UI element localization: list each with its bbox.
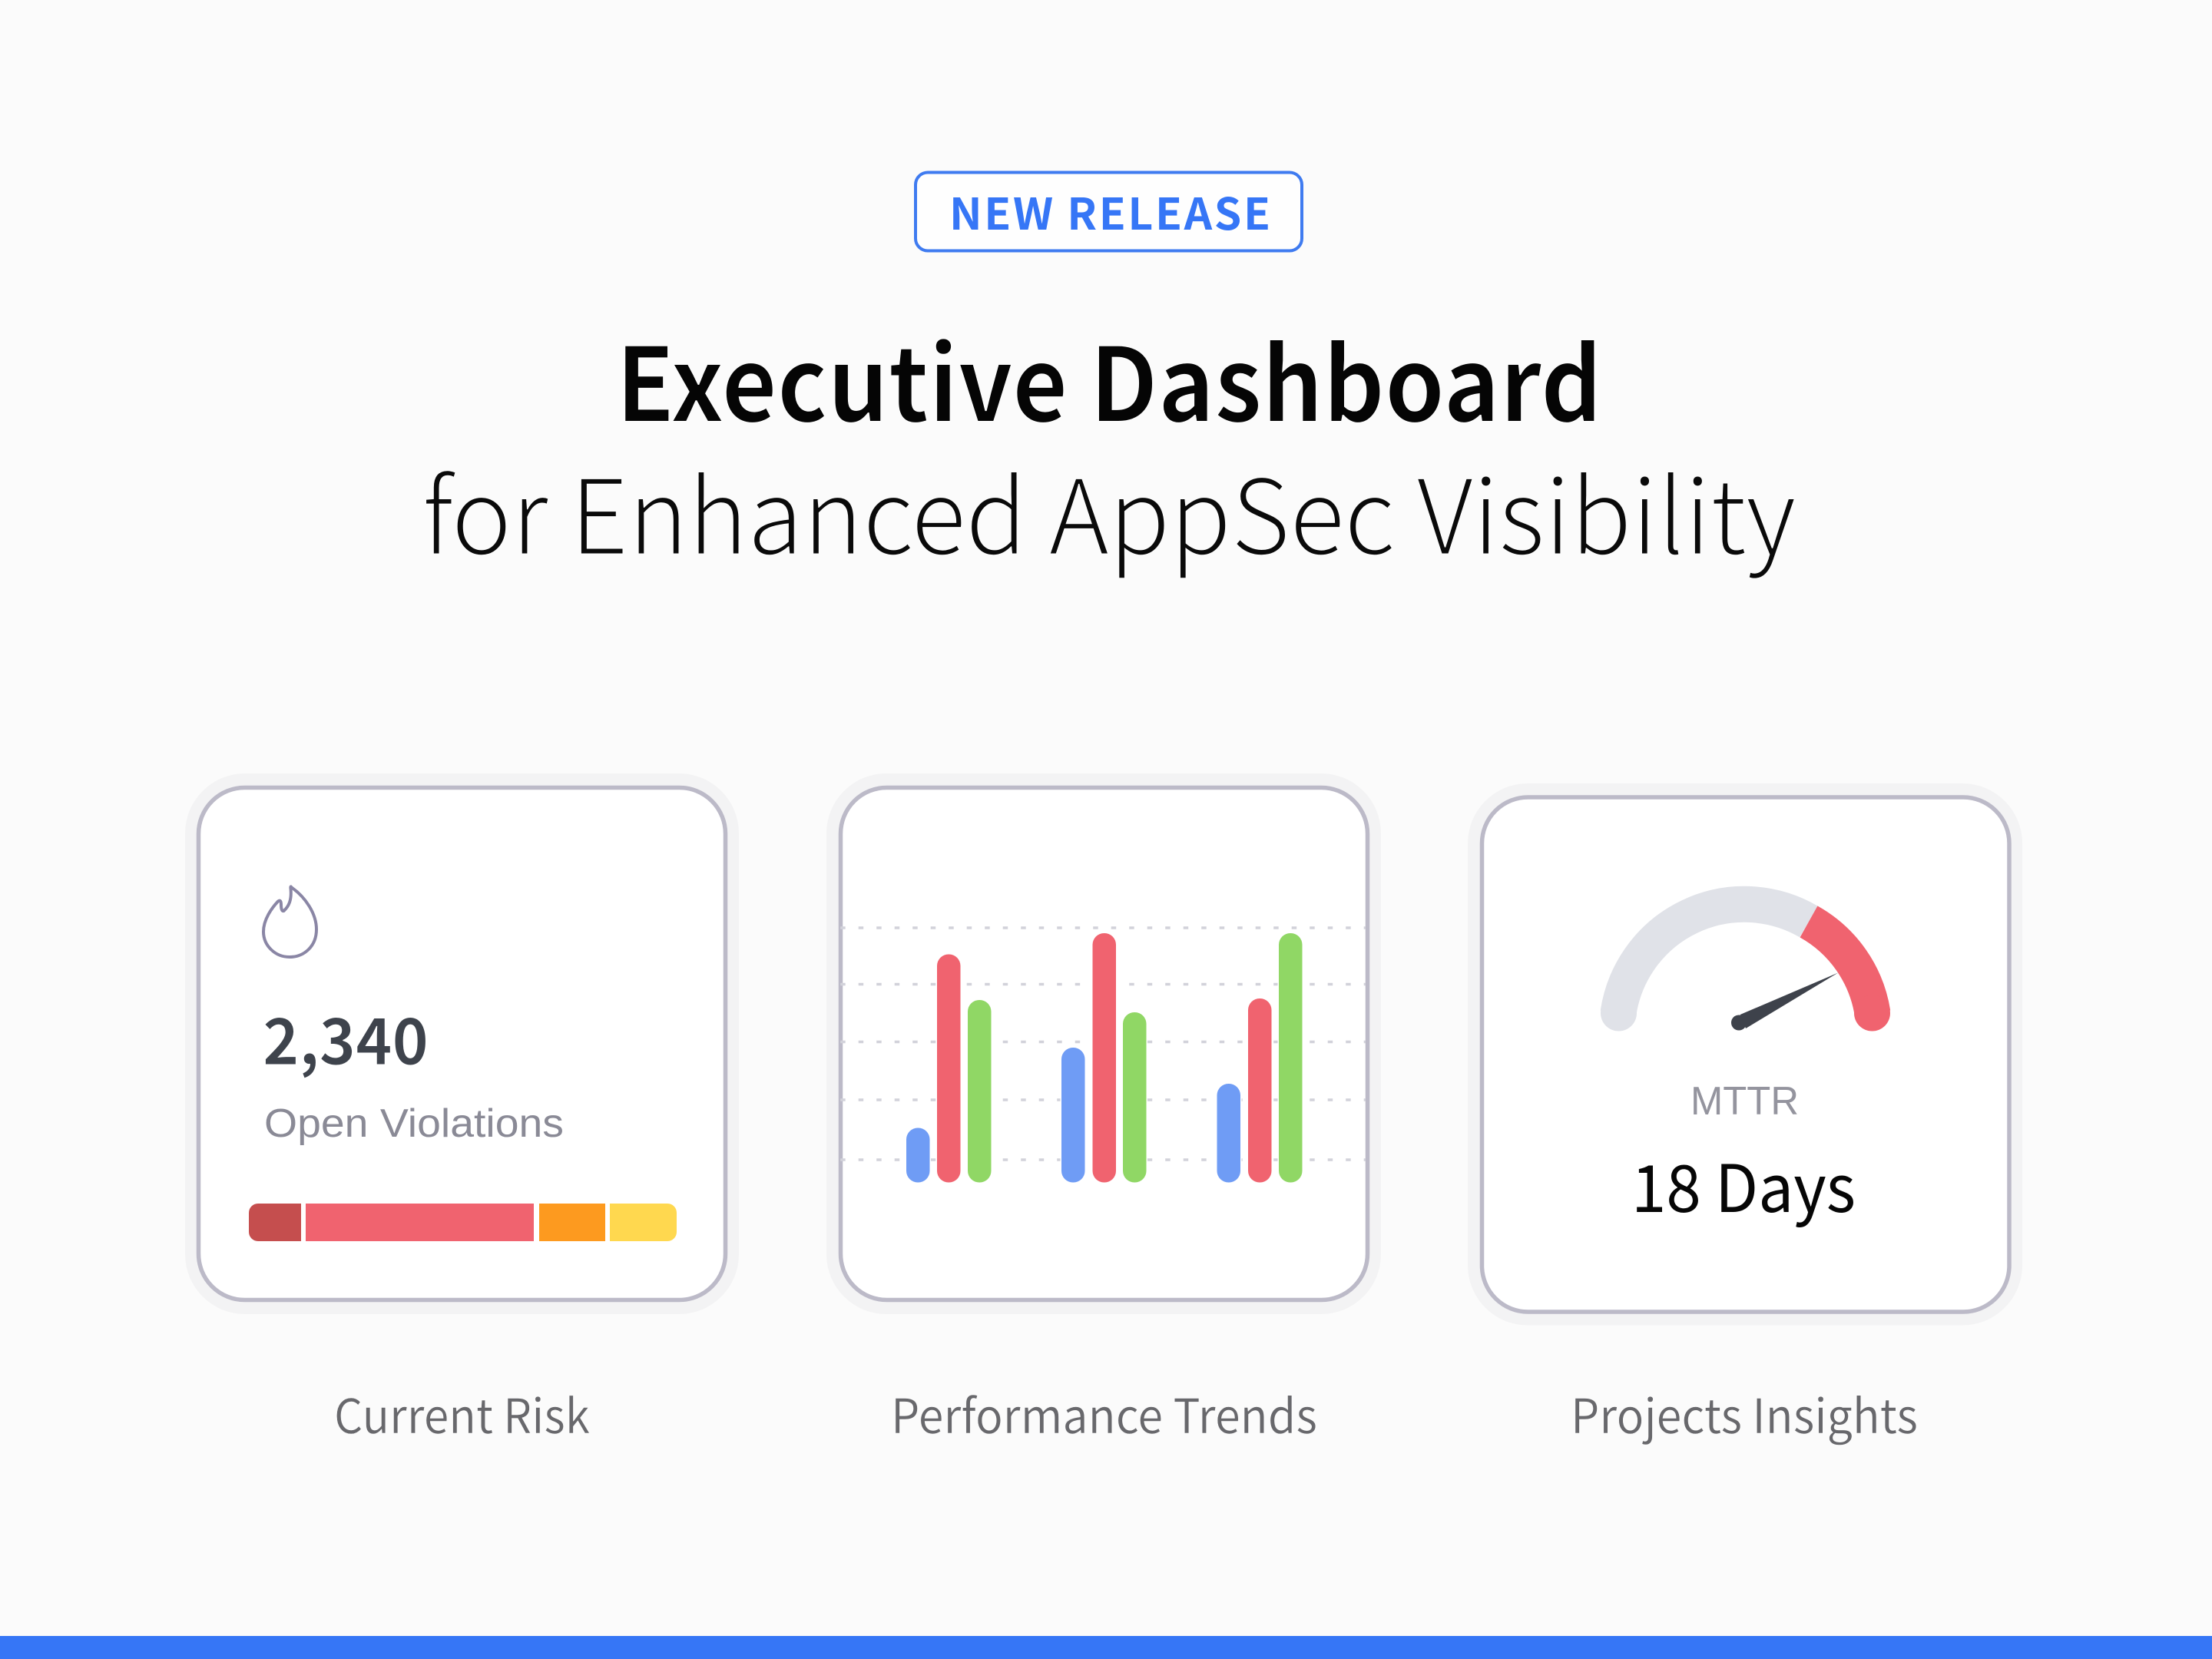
panel: projects insights	[1468, 783, 2022, 1326]
metric label: open violations: Open Violations	[264, 1101, 564, 1146]
metric label: mttr: MTTR	[1690, 1079, 1799, 1124]
footer accent bar	[0, 1636, 2212, 1659]
gauge	[1601, 904, 1890, 1031]
metric: 18 days: 18 Days	[1631, 1137, 1856, 1231]
icon: flame	[263, 886, 316, 957]
bar group 2	[1061, 933, 1146, 1183]
caption: performance trends: Performance Trends	[891, 1378, 1317, 1447]
badge: new release	[916, 172, 1302, 250]
title: Executive Dashboard	[616, 303, 1602, 452]
bar group 1	[906, 954, 991, 1183]
gauge needle	[1731, 973, 1838, 1031]
panel: current risk	[185, 773, 739, 1314]
caption: projects insights: Projects Insights	[1571, 1378, 1918, 1447]
caption: current risk: Current Risk	[334, 1378, 590, 1447]
panel: performance trends	[826, 773, 1381, 1314]
severity stacked bar	[249, 1204, 677, 1241]
metric: open violations count: 2,340	[263, 991, 429, 1084]
badge: new release: NEW RELEASE	[949, 180, 1270, 243]
bar chart	[906, 933, 1303, 1183]
bar group 3	[1217, 933, 1303, 1183]
subtitle: for Enhanced AppSec Visibility	[422, 435, 1796, 584]
